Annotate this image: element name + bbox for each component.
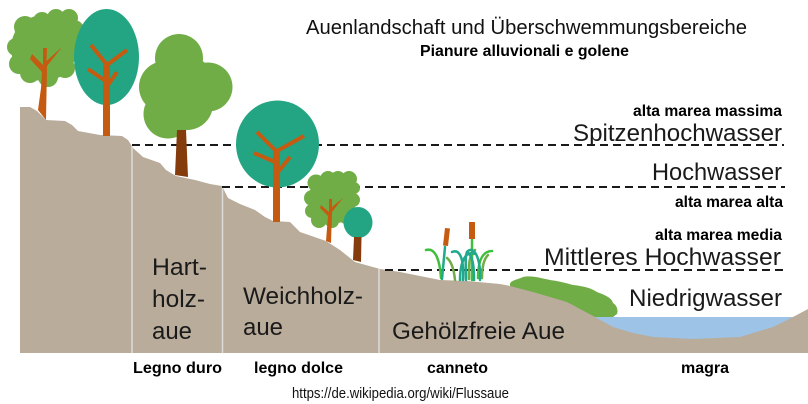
water level label: Spitzenhochwasser — [573, 103, 782, 147]
tree: large teal round — [236, 100, 319, 222]
water level label: Mittleres Hochwasser — [544, 227, 782, 271]
title: Auenlandschaft und Überschwemmungsbereiche — [306, 17, 747, 39]
tree: small green cloud — [304, 171, 360, 243]
zone label: Hartholzaue: holz- — [152, 286, 205, 313]
water: low water level — [590, 317, 796, 345]
water level label: Hochwasser: Hochwasser — [652, 159, 782, 186]
reeds — [426, 222, 492, 280]
zone label: Weichholzaue: aue — [243, 314, 283, 341]
dashed water level lines — [132, 145, 787, 270]
zone label: Weichholzaue — [243, 283, 363, 341]
Italian zone labels: magra — [681, 360, 729, 377]
subtitle: Pianure alluvionali e golene — [420, 43, 629, 60]
tree: small teal — [344, 207, 372, 262]
water level label: Niedrigwasser: Niedrigwasser — [629, 285, 782, 312]
water level label: Spitzenhochwasser: Spitzenhochwasser — [573, 120, 782, 147]
source URL: https://de.wikipedia.org/wiki/Flussaue — [292, 386, 509, 402]
water level label: Hochwasser — [652, 159, 783, 211]
water level label: Mittleres Hochwasser: alta marea media — [655, 227, 782, 244]
zone label: Hartholzaue: Hart- — [152, 254, 207, 281]
Italian zone labels: canneto — [427, 360, 488, 377]
Italian zone labels — [133, 360, 729, 377]
water level label: Hochwasser: alta marea alta — [675, 194, 783, 211]
zone label: Hartholzaue — [152, 254, 207, 345]
ground profile — [20, 107, 808, 353]
zone dividers — [132, 146, 379, 353]
zone label: Gehölzfreie Aue: Gehölzfreie Aue — [392, 318, 565, 345]
tree: teal oval — [74, 9, 139, 136]
Italian zone labels: Legno duro — [133, 360, 222, 377]
Italian zone labels: legno dolce — [254, 360, 343, 377]
water level label: Spitzenhochwasser: alta marea massima — [633, 103, 782, 120]
green shrub bank — [510, 276, 618, 317]
tree: large green round — [139, 34, 232, 177]
zone label: Hartholzaue: aue — [152, 318, 192, 345]
tree: green cloud hardwood — [7, 9, 84, 120]
water level label: Mittleres Hochwasser: Mittleres Hochwasser — [544, 244, 781, 271]
zone label: Weichholzaue: Weichholz- — [243, 283, 363, 310]
